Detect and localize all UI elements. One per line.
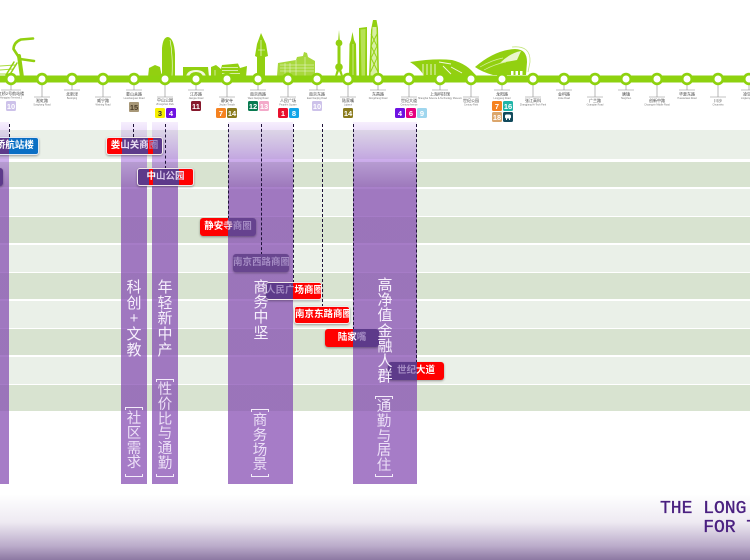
station: 娄山关路 — [124, 73, 145, 100]
station: 东昌路: 东昌路 — [372, 90, 384, 96]
station: 淞虹路 — [33, 73, 51, 106]
panel: row bands — [0, 130, 750, 411]
station: 凌空路 — [741, 73, 750, 100]
transfer line badges: 3 — [158, 109, 162, 118]
skyline: science museum — [410, 59, 476, 76]
station: 川沙 — [710, 73, 726, 106]
panel: column tech and education — [121, 122, 147, 484]
station: 龙阳路 — [494, 73, 511, 100]
station: 张江高科: 张江高科 — [525, 97, 541, 103]
heading: 商务中坚: 务 — [253, 294, 268, 311]
transfer line badges: 9 — [420, 109, 424, 118]
station: 人民广场 — [279, 73, 297, 106]
station: 金科路 — [556, 73, 572, 100]
label: 社区需求: 区 — [127, 426, 141, 442]
station: 陆家嘴: 陆家嘴 — [342, 97, 354, 103]
label: 性价比与通勤: 与 — [158, 426, 172, 442]
tag: 静安寺商圈: 静安寺商圈 — [204, 221, 252, 232]
station: 陆家嘴 — [340, 73, 356, 106]
label: 性价比与通勤: 比 — [158, 412, 172, 428]
transfer line badges — [6, 101, 513, 122]
heading: 高净值金融人群: 金 — [377, 323, 392, 340]
label: 商务场景 — [251, 409, 269, 477]
station: 创新中路: 创新中路 — [649, 97, 665, 103]
heading: 科创+文教: 创 — [126, 295, 142, 312]
transfer line badges: 18 — [493, 113, 501, 122]
station: 人民广场: 人民广场 — [280, 97, 296, 103]
station: 淞虹路: Songhong Road — [33, 104, 51, 106]
transfer line badges: 10 — [7, 102, 15, 111]
station: 陆家嘴: Lujiazui — [344, 104, 353, 106]
station: 世纪公园: Century Park — [464, 104, 479, 106]
heading: 年轻新中产: 轻 — [157, 295, 172, 312]
tag: 中山公园: 中山公园 — [146, 171, 185, 182]
label: 通勤与居住: 住 — [377, 458, 391, 474]
station: 威宁路 — [95, 73, 111, 106]
tag: clipped left tag — [0, 168, 3, 186]
label: 性价比与通勤: 勤 — [158, 456, 172, 472]
label: 通勤与居住: 居 — [377, 443, 391, 459]
panel: purple column far left — [0, 122, 9, 484]
transfer line badges: 13 — [260, 102, 268, 111]
tag: 人民广场商圈: 人民广场商圈 — [266, 285, 322, 296]
heading: 高净值金融人群: 净 — [377, 292, 392, 309]
label: 商务场景: 务 — [253, 428, 267, 444]
station: 金科路: 金科路 — [558, 90, 570, 96]
skyline: twin tower park — [148, 37, 175, 77]
tag: 静安寺商圈 — [200, 218, 256, 236]
heading: 高净值金融人群: 群 — [377, 368, 392, 385]
station: 创新中路: Chuangxin Middle Road — [644, 104, 670, 106]
heading: 高净值金融人群: 人 — [377, 353, 392, 370]
station: 人民广场: People's Square — [279, 104, 297, 106]
transfer line badges: 8 — [292, 109, 296, 118]
station: 世纪大道 — [401, 73, 418, 106]
station: 南京西路: 南京西路 — [250, 90, 266, 96]
station: 南京西路: West Nanjing Road — [248, 97, 269, 100]
station: 东昌路: Dongchang Road — [369, 97, 388, 100]
station: 北新泾: 北新泾 — [66, 90, 78, 96]
tag: 南京东路商圈 — [294, 306, 350, 324]
tag: 虹桥航站楼 — [0, 137, 39, 155]
heading: 年轻新中产: 产 — [157, 342, 172, 359]
tag: 世纪大道 — [388, 362, 444, 380]
label: 商务场景: 景 — [253, 457, 267, 473]
station: 中山公园 — [156, 73, 175, 106]
heading: 年轻新中产: 中 — [157, 326, 172, 343]
station: 广兰路: 广兰路 — [589, 97, 601, 103]
station: 世纪大道: 世纪大道 — [401, 97, 417, 103]
heading: 年轻新中产 — [157, 279, 172, 359]
heading: 商务中坚: 坚 — [253, 325, 268, 342]
skyline: Lujiazui towers — [335, 20, 379, 76]
station: 淞虹路: 淞虹路 — [36, 97, 48, 103]
station: 上海科技馆: Shanghai Science & Technology Museum — [418, 97, 462, 100]
station: 威宁路: 威宁路 — [97, 97, 109, 103]
metro line and skyline — [0, 20, 750, 122]
station: 上海科技馆: 上海科技馆 — [430, 90, 450, 96]
tag: 娄山关商圈 — [106, 137, 163, 155]
tag: 中山公园 — [137, 168, 194, 186]
station: 川沙: 川沙 — [714, 98, 722, 103]
station: 虹桥2号航站楼 — [0, 73, 24, 100]
heading: 商务中坚: 中 — [253, 309, 268, 326]
skyline: oriental arts centre — [475, 47, 530, 76]
heading: 科创+文教 — [126, 279, 142, 359]
tag: 人民广场商圈 — [266, 282, 322, 300]
heading: 年轻新中产: 新 — [157, 310, 172, 327]
station: 龙阳路: Longyang Road — [494, 97, 511, 100]
heading: 高净值金融人群: 融 — [377, 338, 392, 355]
panel: column young middle class — [152, 122, 178, 484]
station: 华夏东路: 华夏东路 — [679, 90, 695, 96]
transfer line badges: 4 — [169, 109, 174, 118]
label: 性价比与通勤: 性 — [158, 382, 172, 398]
station: 虹桥2号航站楼: Hongqiao Terminal 2 — [0, 96, 23, 100]
station: 张江高科: Zhangjiang Hi-Tech Park — [520, 104, 547, 106]
heading: 商务中坚 — [253, 279, 268, 342]
transfer line badges: 10 — [313, 102, 321, 111]
metro line — [0, 76, 750, 82]
station: 南京东路: 南京东路 — [309, 90, 325, 96]
station: 上海科技馆 — [418, 73, 462, 100]
heading: 高净值金融人群 — [377, 277, 392, 385]
heading: 科创+文教: 文 — [126, 326, 142, 343]
label: 性价比与通勤 — [156, 379, 174, 477]
skyline: pagoda tower — [255, 33, 268, 76]
transfer line badges: 14 — [228, 109, 237, 118]
station: 南京东路 — [307, 73, 328, 100]
transfer line badges: 7 — [495, 102, 499, 111]
heading: 年轻新中产: 年 — [157, 279, 172, 296]
station: 川沙: Chuansha — [713, 104, 724, 106]
station: 静安寺: Jing'an Temple — [219, 104, 236, 106]
transfer line badges: 1 — [281, 109, 285, 118]
station: 世纪公园 — [463, 73, 479, 106]
station: 娄山关路: 娄山关路 — [126, 90, 142, 96]
station: 北新泾 — [64, 73, 80, 100]
transfer line badges: 11 — [192, 102, 200, 111]
station: 华夏东路: Huaxia East Road — [677, 97, 697, 100]
station: 世纪大道: Century Avenue — [401, 104, 418, 106]
station: 世纪公园: 世纪公园 — [463, 97, 479, 103]
transfer line badges: 14 — [344, 109, 353, 118]
station: 江苏路: 江苏路 — [190, 90, 202, 96]
station: 南京西路 — [248, 73, 269, 100]
label: 性价比与通勤: 通 — [158, 441, 172, 457]
label: 通勤与居住: 通 — [377, 399, 391, 415]
station: 广兰路: Guanglan Road — [587, 104, 604, 106]
transfer line badges: 12 — [249, 102, 257, 111]
label: 社区需求: 需 — [127, 441, 141, 457]
station: 江苏路: Jiangsu Road — [189, 97, 204, 100]
station: 东昌路 — [369, 73, 388, 100]
heading: 科创+文教: + — [130, 310, 138, 327]
tag: 陆家嘴 — [325, 329, 379, 347]
station: 张江高科 — [520, 73, 547, 106]
panel: column high net worth — [353, 122, 417, 484]
label: 通勤与居住: 与 — [377, 429, 391, 445]
label: 社区需求 — [125, 407, 143, 477]
label: 通勤与居住 — [375, 396, 393, 477]
tag: 世纪大道: 世纪大道 — [397, 365, 435, 376]
transfer line badges: 4 — [398, 109, 403, 118]
station: 静安寺: 静安寺 — [221, 97, 233, 103]
station: 中山公园: Zhongshan Park — [156, 103, 175, 106]
skyline: Jiangsu Road arch — [183, 67, 209, 77]
skyline: Jing'an Temple — [211, 64, 247, 77]
panel: column business core — [228, 122, 293, 484]
station: 华夏东路 — [677, 73, 697, 100]
station: 娄山关路: Loushanguan Road — [124, 97, 145, 100]
station: 威宁路: Weining Road — [96, 104, 111, 106]
label: 社区需求: 求 — [127, 455, 141, 471]
label: 社区需求: 社 — [127, 411, 141, 427]
heading: 商务中坚: 商 — [253, 279, 268, 296]
station: 中山公园: 中山公园 — [157, 96, 173, 102]
station: 唐镇: Tangzhen — [621, 97, 632, 100]
label: 商务场景: 商 — [253, 413, 267, 429]
station: 北新泾: Beixinjing — [67, 97, 78, 100]
station: 唐镇 — [618, 73, 634, 100]
heading: 科创+文教: 科 — [126, 279, 142, 296]
connector lines — [9, 124, 417, 362]
transfer line badges: 6 — [409, 109, 413, 118]
transfer line badges: 15 — [130, 103, 138, 112]
heading: 高净值金融人群: 值 — [377, 307, 392, 324]
station: 广兰路 — [587, 73, 604, 106]
heading: 科创+文教: 教 — [126, 342, 142, 359]
skyline: bridge sculpture — [0, 38, 34, 77]
label: 通勤与居住: 勤 — [377, 414, 391, 430]
station: 金科路: Jinke Road — [558, 97, 571, 100]
heading: 高净值金融人群: 高 — [377, 277, 392, 294]
tag: 南京西路商圈: 南京西路商圈 — [233, 257, 289, 268]
tag: 娄山关商圈: 娄山关商圈 — [111, 140, 158, 151]
label: 性价比与通勤: 价 — [158, 397, 172, 413]
transfer line badges: 16 — [504, 102, 512, 111]
station: 南京东路: East Nanjing Road — [307, 97, 328, 100]
tag: 陆家嘴: 陆家嘴 — [338, 332, 366, 343]
skyline: office block — [277, 52, 315, 76]
station: 静安寺 — [219, 73, 236, 106]
station: 龙阳路: 龙阳路 — [496, 90, 508, 96]
station: 创新中路 — [644, 73, 670, 106]
station: 唐镇: 唐镇 — [622, 90, 630, 96]
label: 商务场景: 场 — [253, 443, 267, 459]
station: 江苏路 — [188, 73, 204, 100]
tag: 南京西路商圈 — [233, 254, 289, 272]
transfer line badges: 7 — [219, 109, 223, 118]
bottom gradient footer — [0, 494, 750, 560]
